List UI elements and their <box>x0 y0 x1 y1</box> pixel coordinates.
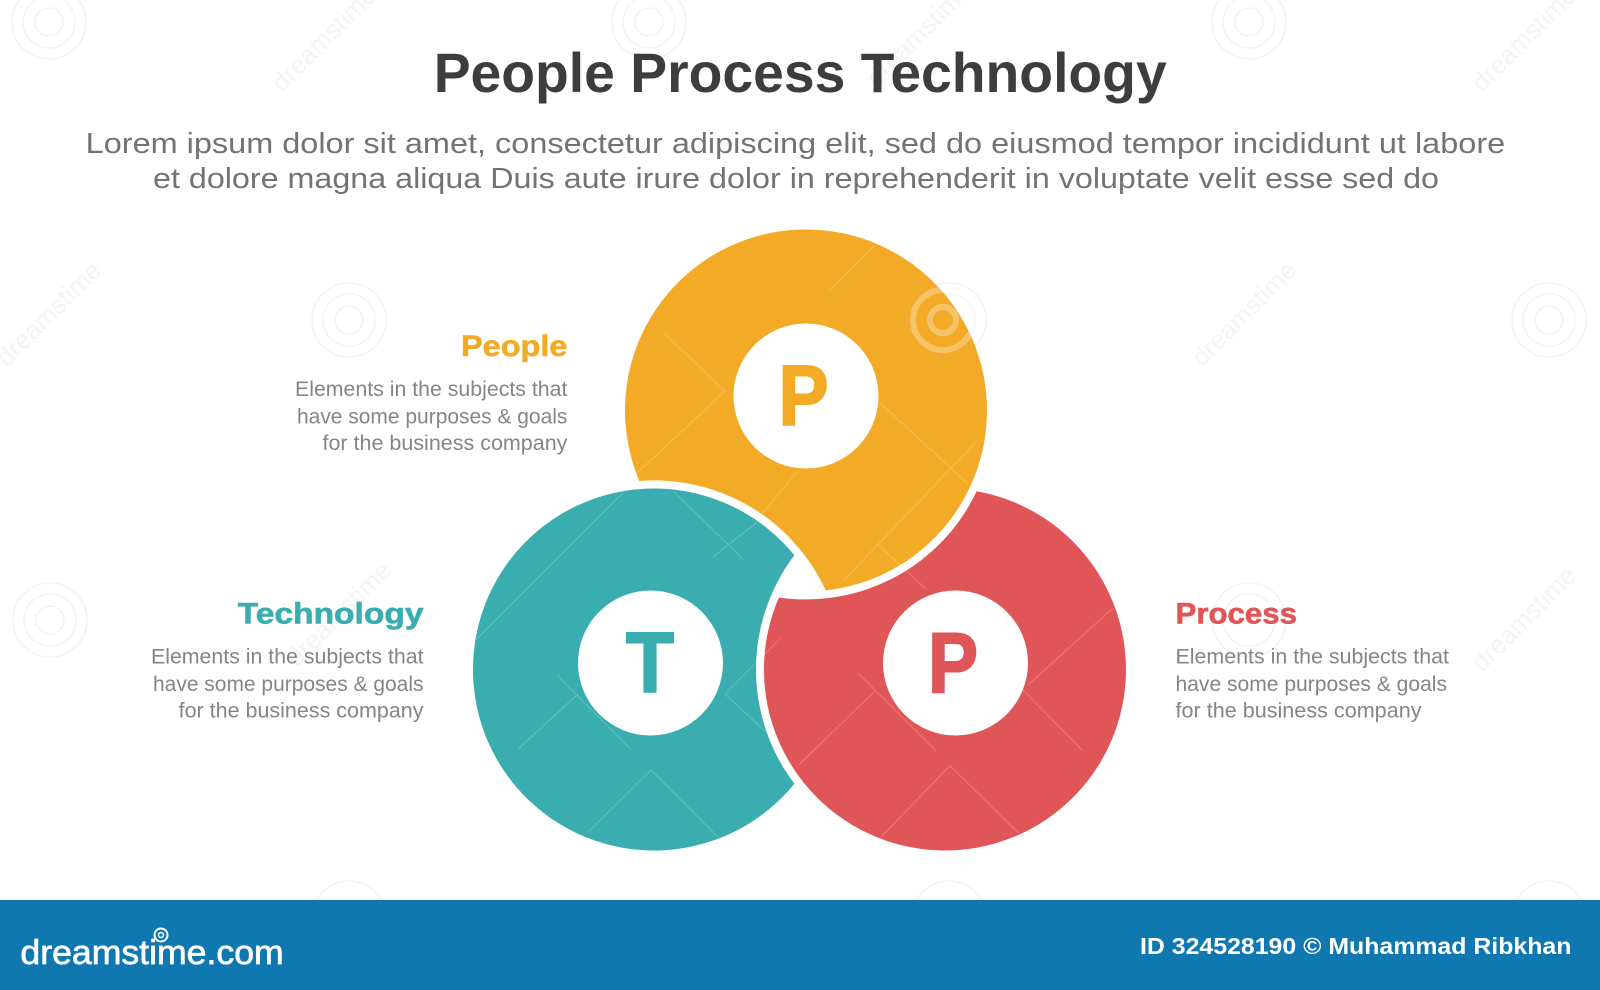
watermark pattern: dreamstime <box>1465 560 1582 677</box>
subtitle text block: Lorem ipsum dolor sit amet, consectetur adipiscing elit, sed do eiusmod tempor incididunt ut labore <box>86 128 1505 160</box>
watermark pattern: dreamstime <box>1185 255 1302 372</box>
teal circle segment: Technology <box>473 488 794 850</box>
text block: Process <box>1176 598 1449 722</box>
text block: Technology: Technology <box>238 598 424 630</box>
footer credit text: ID 324528190 © Muhammad Ribkhan <box>1140 933 1571 959</box>
text block: People <box>295 330 568 455</box>
footer bar <box>0 900 1600 990</box>
text block: Technology <box>151 598 424 722</box>
icon: letter P in white circle (Process): P <box>928 616 978 711</box>
subtitle text block: et dolore magna aliqua Duis aute irure dolor in reprehenderit in voluptate velit esse sed do <box>153 163 1439 195</box>
red circle segment: Process <box>764 491 1126 850</box>
icon: letter T in white circle (Technology) <box>578 590 723 736</box>
text block: People: People <box>461 330 567 363</box>
panel: venn diagram <box>473 229 1126 850</box>
text block: Technology: for the business company <box>179 699 424 722</box>
text block: Technology: have some purposes & goals <box>153 673 424 696</box>
icon: letter P in white circle (Process) <box>883 590 1028 736</box>
subtitle text block <box>86 128 1505 195</box>
text block: People: Elements in the subjects that <box>295 378 568 401</box>
text block: Process: Process <box>1176 598 1297 630</box>
icon: letter P in white circle (People) <box>734 324 878 468</box>
text block: People: for the business company <box>322 432 568 455</box>
watermark lines over circles <box>477 246 1113 837</box>
text block: Technology: Elements in the subjects that <box>151 645 424 668</box>
title: People Process Technology <box>434 41 1167 104</box>
watermark pattern: dreamstime <box>280 555 397 672</box>
text block: Process: Elements in the subjects that <box>1176 645 1449 668</box>
icon: letter T in white circle (Technology): T <box>626 616 674 711</box>
text block: Process: have some purposes & goals <box>1176 673 1447 696</box>
orange circle segment: People <box>625 229 987 590</box>
text block: People: have some purposes & goals <box>297 406 567 428</box>
icon: letter P in white circle (People): P <box>778 349 828 444</box>
text block: Process: for the business company <box>1176 699 1422 722</box>
footer logo text: dreamstime.com <box>20 934 284 972</box>
